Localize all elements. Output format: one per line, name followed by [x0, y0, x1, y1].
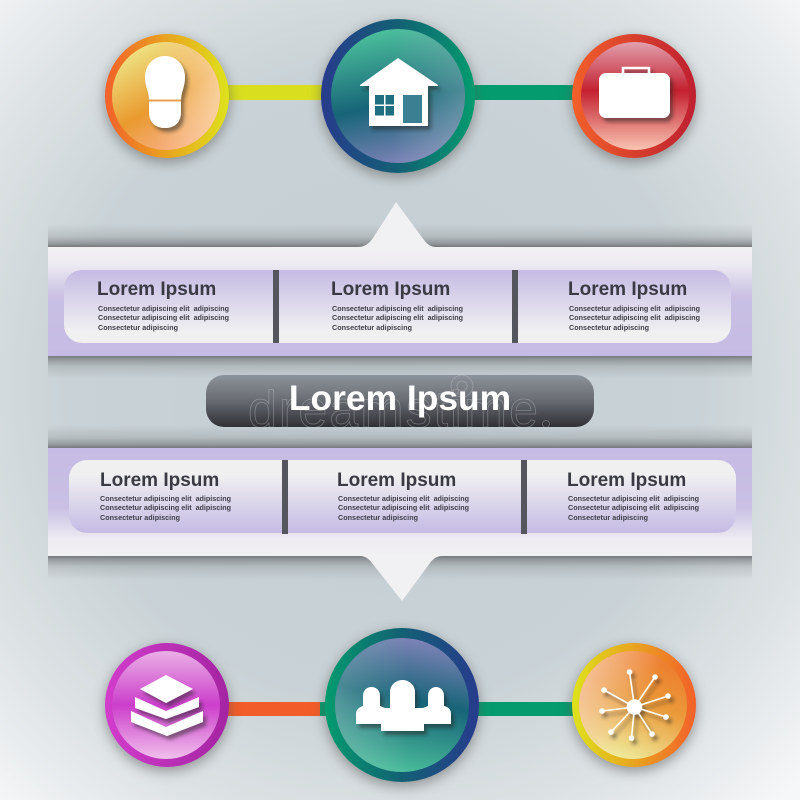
lower pointer triangle	[360, 556, 442, 601]
connector: green bottom	[476, 702, 574, 716]
people glyph	[356, 680, 451, 731]
upper column 1 text: Consectetur adipiscing elit adipiscing	[98, 313, 229, 322]
upper column 3 text: Lorem Ipsum	[568, 279, 687, 300]
upper column 1 text: Lorem Ipsum	[97, 279, 216, 300]
layers glyph	[131, 675, 203, 736]
upper column 2 text: Consectetur adipiscing	[332, 323, 412, 332]
lower inner panel	[69, 460, 736, 533]
panel: upper band	[48, 202, 752, 379]
icon: layers circle	[104, 643, 230, 772]
upper column 3 text: Consectetur adipiscing elit adipiscing	[569, 313, 700, 322]
connector: green top	[472, 85, 574, 100]
lower column 3 text	[567, 470, 699, 522]
panel: lower band	[48, 425, 752, 601]
icon: house circle	[320, 19, 476, 178]
upper column 1 text: Consectetur adipiscing	[98, 323, 178, 332]
house glyph	[360, 58, 438, 126]
lower column 3 text: Consectetur adipiscing elit adipiscing	[568, 503, 699, 512]
upper column 2 text	[331, 279, 463, 332]
upper column 2 text: Consectetur adipiscing elit adipiscing	[332, 304, 463, 313]
lower column 2 text	[337, 470, 469, 522]
lower column 3 text: Lorem Ipsum	[567, 470, 686, 491]
lower column 1 text: Consectetur adipiscing elit adipiscing	[100, 494, 231, 503]
title pill: Lorem Ipsum	[289, 378, 511, 418]
icon: briefcase circle	[571, 34, 697, 163]
upper column 2 text: Consectetur adipiscing elit adipiscing	[332, 313, 463, 322]
connector: green bottom left stub	[320, 702, 330, 716]
upper column 2 text: Lorem Ipsum	[331, 279, 450, 300]
upper column 3 text: Consectetur adipiscing	[569, 323, 649, 332]
upper column 1 text	[97, 279, 229, 332]
upper column 3 text	[568, 279, 700, 332]
lower column 2 text: Consectetur adipiscing elit adipiscing	[338, 494, 469, 503]
lower column 3 text: Consectetur adipiscing elit adipiscing	[568, 494, 699, 503]
lower column 1 text: Lorem Ipsum	[100, 470, 219, 491]
bulb glyph	[145, 56, 185, 128]
lower column 2 text: Consectetur adipiscing elit adipiscing	[338, 503, 469, 512]
briefcase glyph	[599, 68, 670, 118]
icon: people circle	[324, 628, 480, 787]
icon: network circle	[571, 643, 697, 772]
lower column 2 text: Lorem Ipsum	[337, 470, 456, 491]
upper column 1 text: Consectetur adipiscing elit adipiscing	[98, 304, 229, 313]
upper pointer triangle	[358, 202, 436, 247]
network glyph	[600, 670, 670, 740]
watermark outline: dreamstime	[248, 381, 538, 439]
lower column 1 text	[100, 470, 231, 522]
connector: yellow top	[226, 85, 324, 100]
upper inner panel	[64, 270, 731, 343]
icon: bulb circle	[104, 34, 230, 163]
lower column 3 text: Consectetur adipiscing	[568, 513, 648, 522]
lower column 2 text: Consectetur adipiscing	[338, 513, 418, 522]
lower column 1 text: Consectetur adipiscing	[100, 513, 180, 522]
connector: orange bottom	[226, 702, 324, 716]
title pill	[206, 375, 594, 439]
upper column 3 text: Consectetur adipiscing elit adipiscing	[569, 304, 700, 313]
lower column 1 text: Consectetur adipiscing elit adipiscing	[100, 503, 231, 512]
